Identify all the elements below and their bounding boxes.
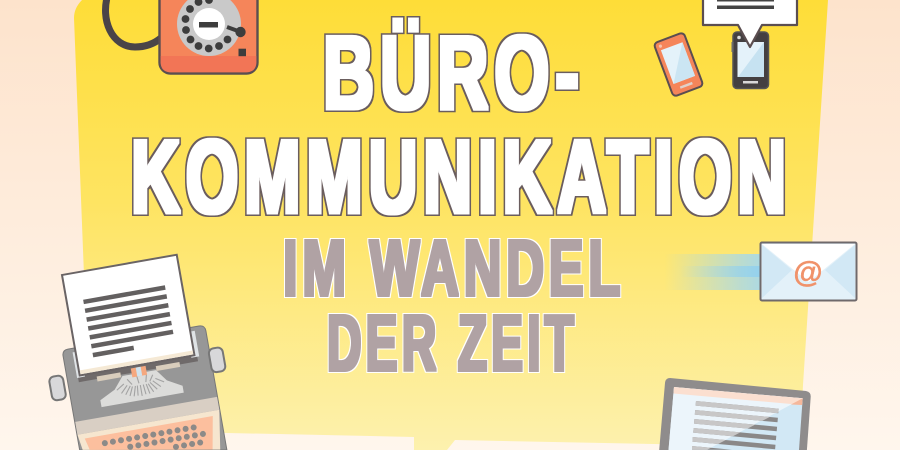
icon: typewriter	[31, 250, 240, 450]
icon: flying email: @	[793, 256, 823, 289]
subtitle: Im Wandel der Zeit: IM WANDEL	[283, 223, 625, 312]
icon: black smartphone	[732, 32, 768, 88]
subtitle: Im Wandel der Zeit: DER ZEIT	[327, 298, 578, 387]
icon: flying email	[665, 242, 856, 300]
icon: orange smartphone	[654, 32, 703, 97]
title: Büro-Kommunikation	[131, 15, 792, 235]
icon: laptop	[659, 378, 811, 450]
subtitle: Im Wandel der Zeit	[283, 223, 625, 387]
title: Büro-Kommunikation: BÜRO-	[323, 15, 585, 131]
icon: rotary telephone	[102, 0, 259, 75]
icon: speech bubble	[702, 0, 798, 48]
